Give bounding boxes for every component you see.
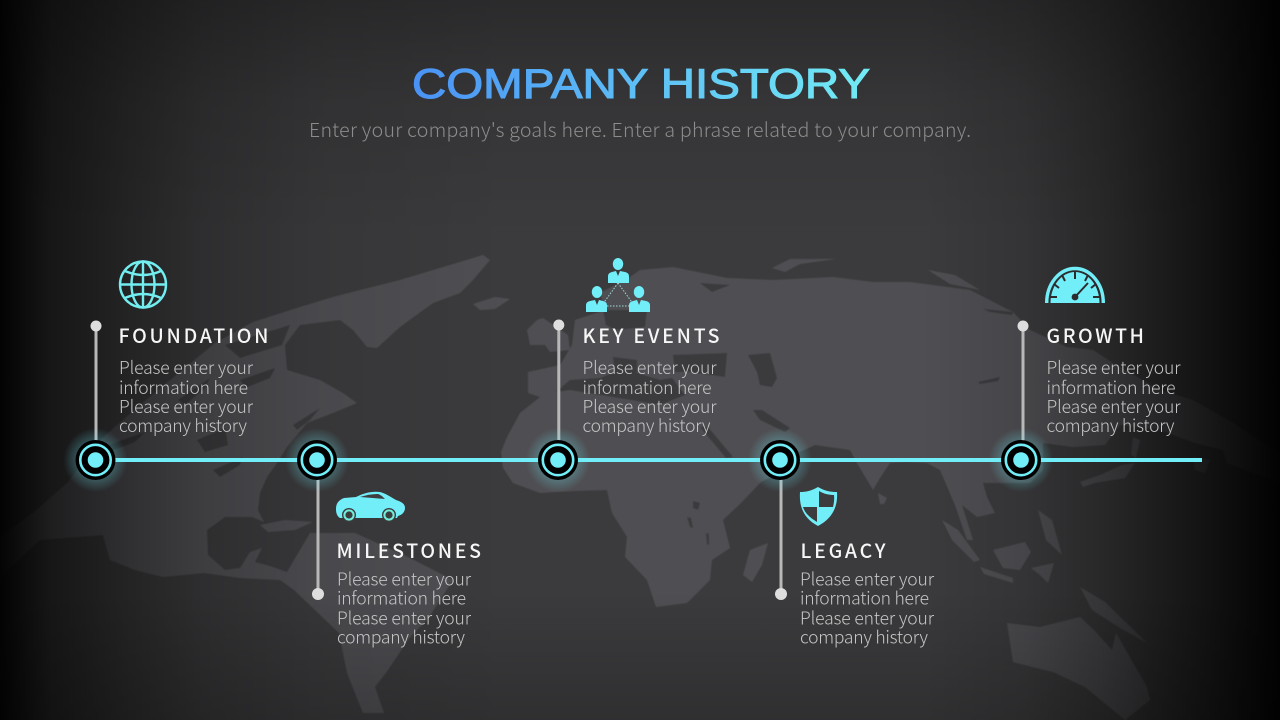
text block: milestones: Please enter your: [337, 606, 472, 630]
text block: key events: Please enter your: [582, 394, 717, 419]
text block: foundation: [119, 355, 254, 438]
text block: milestones: information here: [337, 586, 466, 610]
text block: legacy: Please enter your: [800, 606, 935, 630]
panel: legacy: [800, 535, 935, 650]
node 1: [64, 428, 128, 492]
timeline: [64, 320, 1202, 600]
icon: car: [336, 492, 405, 522]
text block: foundation: company history: [119, 413, 247, 438]
node 4: [748, 428, 812, 492]
icon: globe: [120, 262, 166, 308]
text block: legacy: [800, 566, 935, 650]
subtitle: Enter your company's goals here. Enter a phrase related to your company.: [309, 114, 971, 143]
heading: growth: GROWTH: [1046, 320, 1144, 349]
text block: growth: [1046, 355, 1181, 438]
icon: shield: [800, 487, 837, 526]
node 2: [285, 428, 349, 492]
text block: key events: company history: [582, 413, 711, 438]
map: Americas and Greenland: [0, 255, 490, 713]
text block: key events: [582, 355, 717, 438]
text block: growth: information here: [1046, 375, 1176, 400]
text block: foundation: Please enter your: [119, 394, 254, 419]
text block: milestones: Please enter your: [337, 566, 472, 592]
text block: milestones: [337, 566, 472, 650]
icon: speedometer: [1047, 268, 1103, 303]
text block: growth: Please enter your: [1046, 394, 1181, 419]
text block: growth: company history: [1046, 413, 1175, 438]
node 3: [526, 428, 590, 492]
text block: legacy: information here: [800, 586, 929, 610]
text block: growth: Please enter your: [1046, 355, 1181, 380]
heading: foundation: FOUNDATION: [118, 320, 268, 349]
text block: foundation: Please enter your: [119, 355, 254, 380]
map: Africa and Eurasia: [501, 267, 1280, 607]
panel: foundation: [118, 320, 268, 438]
stems and caps: [90, 320, 1028, 600]
panel: growth: [1046, 320, 1181, 438]
heading: milestones: MILESTONES: [336, 535, 481, 564]
map: islands and Australia: [260, 259, 1210, 720]
text block: key events: Please enter your: [582, 355, 717, 380]
icon: people network: [586, 258, 650, 312]
timeline line: [110, 458, 1202, 462]
text block: foundation: information here: [119, 375, 248, 400]
title: COMPANY HISTORY: [412, 60, 870, 107]
panel: milestones: [336, 535, 481, 650]
text block: legacy: company history: [800, 624, 928, 650]
node 5: [989, 428, 1053, 492]
map: seas and Canadian inlets: [103, 283, 1013, 545]
text block: legacy: Please enter your: [800, 566, 935, 592]
heading: key events: KEY EVENTS: [582, 320, 720, 349]
text block: key events: information here: [582, 375, 712, 400]
panel: key events: [582, 320, 720, 438]
heading: legacy: LEGACY: [800, 535, 886, 564]
world map: [0, 255, 1280, 720]
text block: milestones: company history: [337, 624, 465, 650]
